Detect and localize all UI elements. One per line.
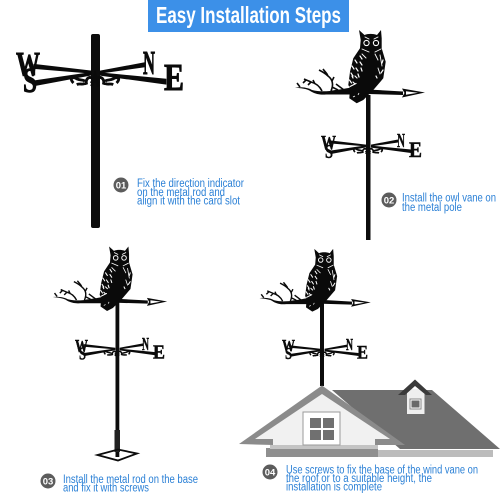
step 2: owl vane on metal pole: W xyxy=(321,132,336,154)
dormer xyxy=(398,380,432,414)
step 2: owl vane on metal pole: S xyxy=(325,141,333,163)
step 4: wind vane on the pole: N xyxy=(346,335,353,354)
step 4: wind vane on the pole: E xyxy=(357,342,368,364)
step 3: metal rod on base: S xyxy=(79,344,86,364)
step 3 caption xyxy=(40,474,198,494)
step 2: owl vane on metal pole: E xyxy=(409,137,422,162)
step 3: metal rod on base: W xyxy=(75,336,88,356)
step 2: owl vane on metal pole xyxy=(295,30,425,240)
step 3: metal rod on base: E xyxy=(153,342,165,364)
step 1: direction indicator on metal rod: E xyxy=(164,57,184,99)
step 1: direction indicator on metal rod: W xyxy=(16,46,40,83)
house with roof xyxy=(239,380,500,457)
title banner xyxy=(148,0,349,32)
step 4: wind vane on the pole: W xyxy=(282,336,295,355)
step 1: direction indicator on metal rod xyxy=(16,34,184,228)
step 1: direction indicator on metal rod: S xyxy=(23,61,37,100)
step 4 caption: 04 xyxy=(265,468,276,478)
step 1: direction indicator on metal rod: N xyxy=(143,45,155,82)
step 4: wind vane on the pole xyxy=(260,249,371,386)
step 3: metal rod on base xyxy=(53,246,167,460)
step 4 caption: installation is complete xyxy=(286,482,382,494)
gable window xyxy=(303,412,340,445)
step 3: metal rod on base: N xyxy=(142,334,149,354)
step 1 caption: on the metal rod and xyxy=(137,187,225,199)
step 2 caption: the metal pole xyxy=(402,202,462,214)
step 2: owl vane on metal pole: N xyxy=(397,130,405,152)
step 4 caption xyxy=(262,464,478,494)
step 1 caption: Fix the direction indicator xyxy=(137,178,244,190)
step 2 caption: 02 xyxy=(384,196,394,206)
step 1 caption: 01 xyxy=(116,180,127,192)
step 3 caption: and fix it with screws xyxy=(63,482,149,494)
title banner: Easy Installation Steps xyxy=(156,2,341,28)
step 4: wind vane on the pole: S xyxy=(285,344,292,363)
step 1 caption: align it with the card slot xyxy=(137,196,241,208)
step 4 caption: the roof or to a suitable height, the xyxy=(286,473,432,485)
step 2 caption xyxy=(382,192,496,214)
step 3 caption: 03 xyxy=(43,476,53,488)
step 3 caption: Install the metal rod on the base xyxy=(63,474,198,486)
step 1 caption xyxy=(114,178,244,208)
